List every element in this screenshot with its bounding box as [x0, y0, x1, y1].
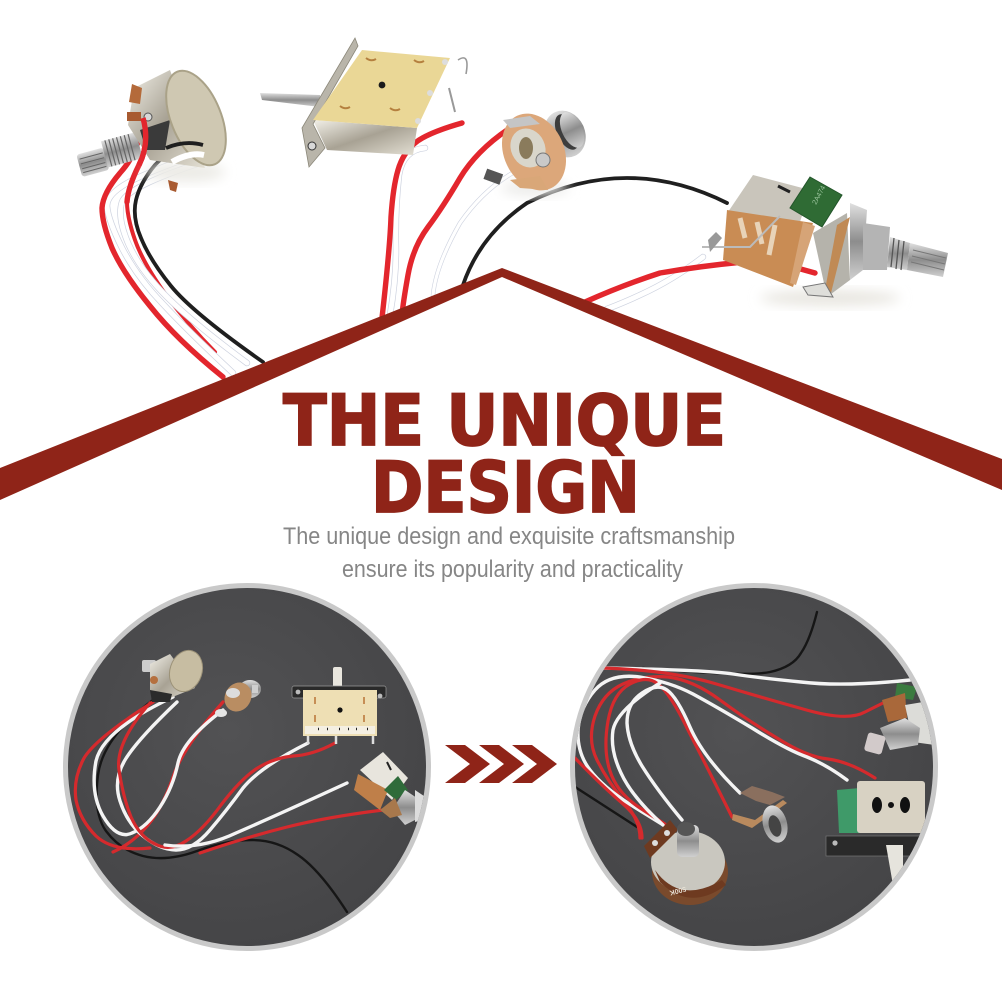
title: THE UNIQUE	[283, 380, 726, 462]
icon: potentiometer, right photo	[644, 820, 728, 905]
icon: switch, left photo	[292, 667, 386, 744]
subtitle: ensure its popularity and practicality	[342, 556, 683, 583]
icon: push-pull potentiometer with capacitor	[702, 175, 948, 306]
roof band	[0, 268, 1002, 500]
panel: left circular photo	[63, 583, 431, 951]
icon: potentiometer, left	[76, 62, 238, 192]
icon: potentiometer, right photo: 500K	[669, 885, 687, 896]
wire bundle: left	[102, 118, 263, 377]
wires: right photo	[572, 612, 910, 838]
subtitle	[283, 523, 735, 583]
icon: jack, right photo	[732, 786, 792, 845]
icon: switch, right photo	[826, 781, 925, 881]
icon: push-pull potentiometer with capacitor: 2A474	[812, 185, 827, 206]
arrow: triple chevron	[445, 745, 557, 783]
icon: output jack	[483, 103, 593, 201]
icon: pickup selector switch	[260, 38, 467, 167]
wires: left photo	[75, 697, 383, 912]
title: DESIGN	[371, 447, 640, 529]
panel: white content area	[0, 277, 1002, 1002]
icon: potentiometer, left photo	[142, 650, 204, 702]
icon: jack, left photo	[215, 678, 261, 717]
title	[283, 380, 726, 529]
icon: push-pull pot, left photo	[354, 752, 430, 825]
panel: top product photo	[76, 38, 948, 377]
wire bundle: centre and right	[382, 123, 815, 318]
subtitle: The unique design and exquisite craftsmanship	[283, 523, 735, 550]
icon: push-pull pot, right photo	[864, 683, 935, 755]
panel: right circular photo	[570, 583, 938, 951]
